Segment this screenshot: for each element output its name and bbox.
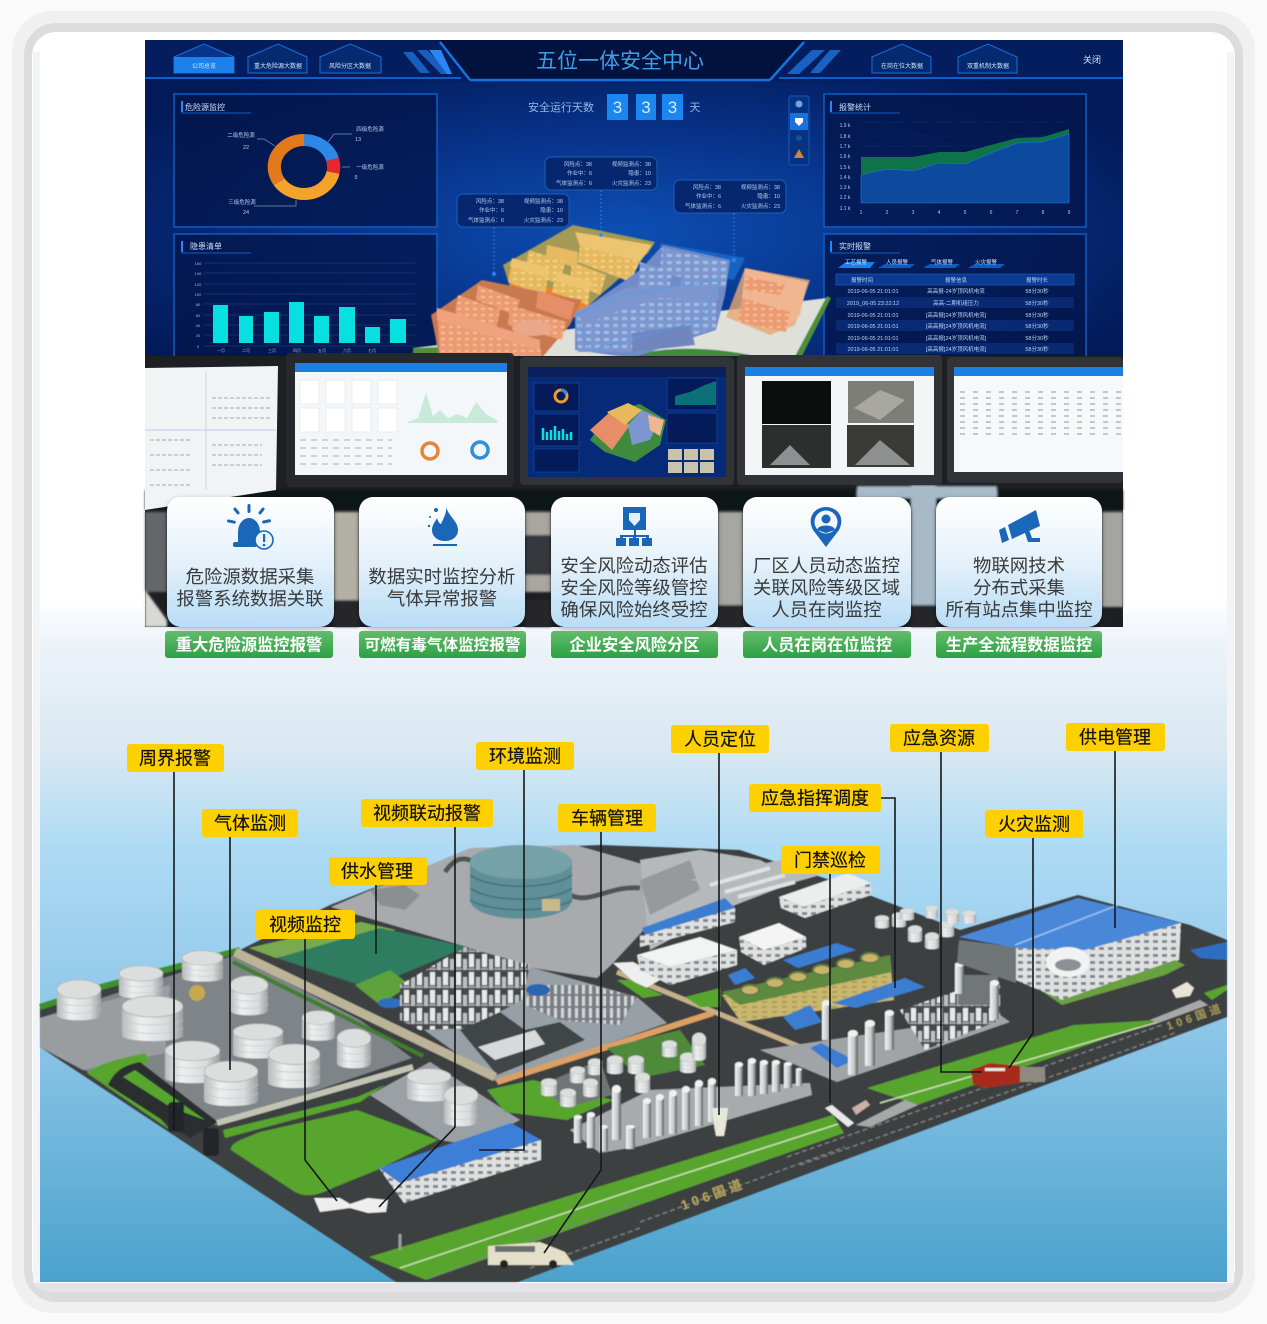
label: 应急资源: 应急资源 [903,728,975,748]
panel: realtime alarm table: 58分30秒 [1025,322,1049,330]
panel: realtime alarm table: 报警时长 [1026,276,1048,284]
panel: alarm statistics area chart: 9 [1068,210,1071,216]
label: 火灾监测: 火灾监测 [998,814,1070,834]
feature card 1 [167,497,334,627]
panel: hidden danger list bar chart: 20 [196,333,201,338]
label: 供电管理 [1066,723,1165,751]
label: 门禁巡检: 门禁巡检 [794,850,866,870]
label: 供水管理 [329,857,427,885]
panel: danger source monitor donut: 13 [355,137,361,143]
panel: realtime alarm table: 2019-06-05 21:01:01 [847,347,899,353]
card text [945,555,1093,620]
panel: alarm statistics area chart: 5 [964,210,967,216]
callout: left: 风险点：38 [476,197,504,205]
safe running days counter: 3 [668,98,677,117]
panel: realtime alarm table: 58分30秒 [1025,334,1049,342]
blue zone [575,245,730,358]
panel: alarm statistics area chart: 1.2 k [840,195,851,201]
nav button: 双重机制大数据: 双重机制大数据 [967,62,1009,70]
lawn [231,1110,438,1195]
label: 供电管理: 供电管理 [1079,728,1151,748]
label: 周界报警 [127,744,224,772]
beige pipeline [235,952,495,1077]
panel: alarm statistics area chart: 2 [886,210,889,216]
panel: realtime alarm table: 2019_06-05 23:22:12 [847,301,899,307]
central distillation tower block [400,947,530,1030]
label: 人员定位: 人员定位 [684,730,756,750]
card text [176,566,324,609]
3D campus model [413,225,831,360]
icon: cctv camera [999,510,1040,543]
callout: top: 作业中：6 [567,169,592,177]
safe running days counter: 3 [613,98,622,117]
panel: hidden danger list bar chart: 60 [196,313,201,318]
label: 周界报警: 周界报警 [139,748,211,768]
label: 环境监测 [476,742,574,770]
card text: 安全风险等级管控 [560,577,708,598]
nav button: 重大危险源大数据 [248,44,307,73]
panel: hidden danger list bar chart: 140 [195,271,202,276]
panel: realtime alarm table: 58分30秒 [1025,299,1049,307]
vertical icon toolbar [789,96,809,165]
safe running days counter [528,94,700,120]
panel: danger source monitor donut: 一级危险源 [356,163,384,171]
card text: 报警系统数据关联 [176,588,324,609]
label bar 3 [551,631,718,658]
label bar 2 [359,631,526,658]
panel: alarm statistics area chart: 1.1 k [840,206,851,212]
nav button: 公司总览 [174,44,234,73]
nav button: 风险分区大数据 [320,44,381,73]
road text: 106 national road right: 106国道 [1164,1000,1226,1033]
panel: realtime alarm table: 高高-二期机组压力 [933,299,979,307]
card text: 确保风险始终受控 [560,599,708,620]
close label: 关闭 [1083,54,1101,65]
safe running days counter: 安全运行天数 [528,100,594,114]
label: 车辆管理: 车辆管理 [571,808,643,828]
small van on upper right [1172,982,1194,998]
callout: top: 火灾监测点：23 [612,179,651,187]
label: 环境监测: 环境监测 [489,746,561,766]
nav button: 风险分区大数据: 风险分区大数据 [329,62,371,70]
callout: left: 火灾监测点：23 [524,216,563,224]
panel: realtime alarm table: [高高报]24岁顶风机电流] [926,345,987,353]
card text [753,555,900,620]
label: 人员定位 [671,725,769,753]
salmon left zone [431,280,582,360]
callout: left [457,194,569,227]
tank farm ring road and verge [87,1053,218,1138]
panel: hidden danger list bar chart: 三月 [268,348,276,353]
panel: danger source monitor donut: 三级危险源 [228,198,256,206]
panel: hidden danger list bar chart: 二月 [242,348,250,353]
callout: top: 风险点：38 [564,160,592,168]
callout: top: 气体监测点：6 [556,179,592,187]
vehicle: red white van [852,1100,870,1115]
panel: hidden danger list bar chart: 160 [195,261,202,266]
card text: 分布式采集 [973,577,1065,598]
panel: alarm statistics area chart: 1.5 k [840,165,851,171]
panel: danger source monitor donut: 24 [243,210,249,216]
label bar 5: 生产全流程数据监控 [946,636,1092,654]
panel: hidden danger list bar chart: 100 [195,292,202,297]
panel: alarm statistics area chart: 6 [990,210,993,216]
panel: danger source monitor donut: 5 [354,175,358,181]
panel: hidden danger list bar chart: 80 [196,302,201,307]
panel: alarm statistics area chart: 3 [912,210,915,216]
blue rear highlight [660,243,745,280]
panel: realtime alarm table: 2019-06-05 21:01:01 [847,336,899,342]
panel: alarm statistics area chart: 7 [1016,210,1019,216]
road text: 106 national road: 106国道 [679,1176,748,1213]
label bar 4 [743,631,911,658]
parked white cars near warehouse [314,1198,388,1213]
callout leader lines [174,751,1115,1253]
panel: alarm statistics area chart: 报警统计 [839,102,871,112]
panel: realtime alarm table: [高高报]24岁顶风机电流] [926,334,987,342]
panel: alarm statistics area chart [824,94,1086,227]
warehouse with blue roof [379,1123,541,1203]
label bar 1 [165,631,333,658]
panel: realtime alarm table: 58分30秒 [1025,345,1049,353]
panel: danger source monitor donut: 危险源监控 [185,102,225,112]
label: 应急资源 [890,724,989,752]
dashboard header bar [145,40,1123,81]
central process plant pad [420,967,667,1082]
gray central slab with water tower [331,845,800,978]
panel: realtime alarm table: 气体报警 [931,258,953,266]
callout: left: 气体监测点：6 [468,216,504,224]
nav button: 在岗在位大数据: 在岗在位大数据 [881,62,923,70]
bars [213,302,406,343]
panel: alarm statistics area chart: 1.8 k [840,134,851,140]
isometric plant scene [40,845,1227,1282]
yellow zone [503,225,655,327]
panel: realtime alarm table [824,234,1086,360]
callout: right: 作业中：6 [696,192,721,200]
label bar 1: 重大危险源监控报警 [176,636,322,654]
label bar 3: 企业安全风险分区 [569,636,700,654]
panel: hidden danger list bar chart: 0 [197,344,200,349]
monitor 1 [145,366,278,510]
panel: hidden danger list bar chart: 120 [195,282,202,287]
panel: realtime alarm table: 工艺报警 [845,258,867,266]
panel: realtime alarm table: [高高报]24岁顶风机电流] [926,322,987,330]
callout: right: 隐患：10 [757,192,780,200]
area: green [861,129,1069,175]
panel: danger source monitor donut: 22 [243,145,249,151]
nav button: 公司总览: 公司总览 [192,62,216,70]
right gate plaza [1150,1000,1208,1023]
card text: 厂区人员动态监控 [753,555,900,576]
monitor 5: data table [947,357,1123,483]
panel: hidden danger list bar chart: 一月 [217,348,225,353]
card text: 所有站点集中监控 [945,599,1093,620]
panel: hidden danger list bar chart: 七月 [368,347,376,353]
label: 视频监控: 视频监控 [269,915,341,935]
panel: alarm statistics area chart: 8 [1042,210,1045,216]
tank cluster [57,951,478,1126]
panel: realtime alarm table: 2019-06-05 21:01:01 [847,313,899,319]
label: 应急指挥调度 [749,784,881,812]
card text: 安全风险动态评估 [560,555,708,576]
campus base platform [413,298,827,360]
label: 视频联动报警: 视频联动报警 [373,804,481,824]
area: blue [861,134,1069,203]
sky gradient background [40,600,1227,1282]
dashboard title: 五位一体安全中心 [536,50,704,73]
label bar 4: 人员在岗在位监控 [762,636,892,654]
nav button: 在岗在位大数据 [872,44,931,73]
panel: realtime alarm table: 报警信息 [945,276,967,284]
callout: top [545,157,657,190]
panel: alarm statistics area chart: 1.7 k [840,144,851,150]
panel: realtime alarm table: 2019-06-05 21:01:01 [847,324,899,330]
panel: realtime alarm table: 人员报警 [886,258,908,266]
label: 火灾监测 [985,810,1083,838]
panel: hidden danger list bar chart: 五月 [318,348,326,353]
card text: 人员在岗监控 [771,599,882,620]
salmon right zone [726,268,810,335]
panel: danger source monitor donut [174,94,437,227]
callout: left: 隐患：10 [540,206,563,214]
right plant pad [722,905,1010,1082]
callout: right: 视频监测点：38 [741,183,780,191]
monitor wall photo band [145,353,1123,627]
label bar 5 [936,631,1102,658]
callout: right: 火灾监测点：23 [741,202,780,210]
left tank farm pad [40,955,520,1145]
panel: hidden danger list bar chart: 隐患清单 [190,241,222,251]
panel: realtime alarm table: 火灾报警 [975,258,997,266]
gatehouse plaza [856,1100,918,1127]
feature card 2 [359,497,525,627]
panel: hidden danger list bar chart [174,234,437,360]
mid white buildings [613,860,871,1007]
label: 供水管理: 供水管理 [341,862,413,882]
panel: danger source monitor donut: 四级危险源 [356,125,384,133]
gas sensor icon [189,985,205,1001]
monitor 4: video feeds [737,355,942,485]
panel: alarm statistics area chart: 1.4 k [840,175,851,181]
label: 视频监控 [256,910,355,939]
safe running days counter: 3 [641,98,651,117]
callout: top: 隐患：10 [628,169,651,177]
icon: network shield [616,507,652,546]
monitor 2 [286,353,514,487]
callout: top: 视频监测点：38 [612,160,651,168]
panel: realtime alarm table: 高高报-24岁顶风机电流 [927,287,985,295]
ground base [40,845,1227,1282]
callout: right: 气体监测点：6 [685,202,721,210]
label bar 2: 可燃有毒气体监控报警 [365,635,521,654]
lamp post [398,1234,402,1250]
panel: realtime alarm table: 58分30秒 [1025,311,1049,319]
card text: 危险源数据采集 [186,566,314,587]
desk and wall background [145,485,1123,627]
panel: alarm statistics area chart: 1.6 k [840,154,851,160]
label: 气体监测: 气体监测 [214,814,286,834]
icon: flame [428,507,458,546]
vehicle: fire truck [971,1063,1045,1088]
machinery deck [460,984,637,1075]
callout: left: 作业中：6 [479,206,504,214]
monitor 3: mini dashboard [520,357,734,485]
donut chart [274,140,334,194]
panel: realtime alarm table: 58分30秒 [1025,287,1049,295]
vehicle: bus [488,1242,574,1268]
dashboard screen [145,40,1123,360]
label: 视频联动报警 [361,799,493,827]
label: 气体监测 [202,809,298,837]
card text [368,566,516,609]
panel: realtime alarm table: [高高报]24岁顶风机电流] [926,311,987,319]
nav button: 双重机制大数据 [958,44,1017,73]
bottom green strips [369,985,1227,1280]
main office building [957,898,1227,1005]
second plant pads, small tanks and columns [540,1030,812,1153]
label: 应急指挥调度: 应急指挥调度 [761,788,869,808]
panel: danger source monitor donut: 二级危险源 [227,131,255,139]
feature card 4 [743,497,911,627]
person figure [712,1108,728,1136]
feature card 5 [936,497,1102,627]
card text: 关联风险等级区域 [753,577,900,598]
icon: location pin person [811,507,841,547]
teal pond field [249,922,467,1008]
callout: right [674,180,786,213]
vehicle: white truck [825,1105,854,1127]
safe running days counter: 天 [690,102,700,114]
camera pillar 2 [203,1128,219,1156]
icon: siren alarm [227,504,273,549]
camera pillar 1 [168,1102,184,1132]
card text: 气体异常报警 [387,588,497,609]
card text: 数据实时监控分析 [368,566,516,587]
panel: hidden danger list bar chart: 40 [196,323,201,328]
panel: alarm statistics area chart: 1 [860,210,863,216]
callout: left: 视频监测点：38 [524,197,563,205]
panel: realtime alarm table: 报警时间 [851,276,873,284]
callout: right: 风险点：38 [693,183,721,191]
panel: alarm statistics area chart: 1.3 k [840,185,851,191]
road lane marks [430,1025,1175,1278]
panel: realtime alarm table: 2019-06-05 21:01:01 [847,289,899,295]
label: 门禁巡检 [781,846,880,874]
panel: hidden danger list bar chart: 六月 [343,347,351,353]
card text: 物联网技术 [973,555,1065,576]
feature card 3 [551,497,718,627]
panel: hidden danger list bar chart: 四月 [293,348,301,353]
panel: alarm statistics area chart: 1.9 k [840,123,851,129]
card text [560,555,708,620]
panel: alarm statistics area chart: 4 [938,210,941,216]
nav button: 重大危险源大数据: 重大危险源大数据 [254,62,302,70]
panel: realtime alarm table: 实时报警 [839,241,871,251]
label: 车辆管理 [558,804,656,832]
